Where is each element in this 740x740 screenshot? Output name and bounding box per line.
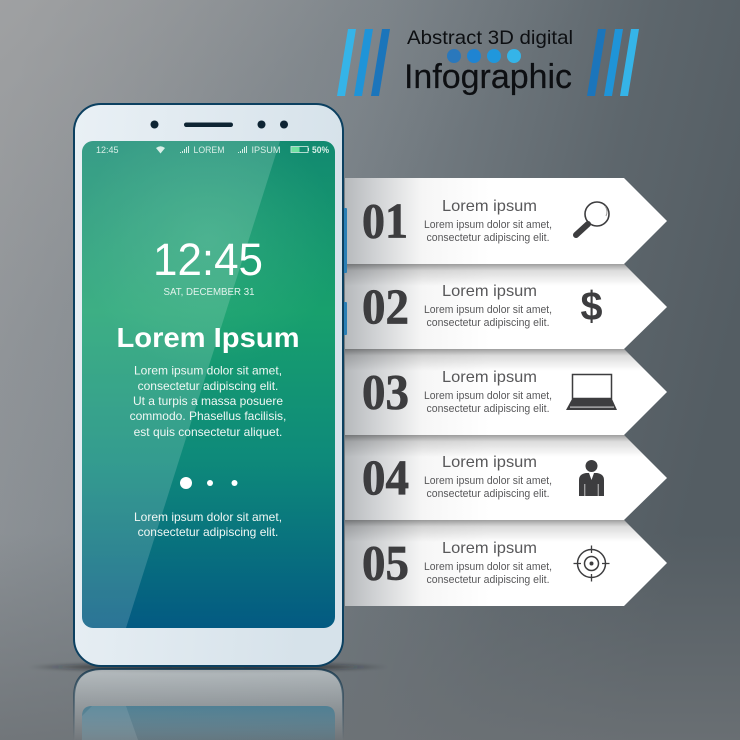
number 04: 04	[362, 449, 409, 505]
ribbon 5 text: Lorem ipsum dolor sit amet,	[424, 561, 552, 573]
ribbon 1 text: Lorem ipsum dolor sit amet,	[424, 219, 552, 231]
date: SAT, DECEMBER 31	[164, 287, 255, 298]
icon: target	[574, 546, 610, 582]
status bar	[96, 145, 329, 155]
heading line 1: Abstract 3D digital	[407, 27, 573, 49]
icon: dollar sign: $	[580, 283, 603, 329]
screen paragraph	[130, 364, 286, 439]
ribbon 2 text: consectetur adipiscing elit.	[426, 317, 550, 329]
heading line 2: Infographic	[404, 58, 572, 96]
screen caption: Lorem ipsum dolor sit amet,	[134, 510, 282, 524]
ribbon 1 text	[424, 198, 552, 244]
screen paragraph: consectetur adipiscing elit.	[138, 379, 278, 393]
icon: magnifying glass	[576, 202, 609, 235]
glass reflection	[82, 141, 280, 628]
icon: wifi	[156, 146, 165, 154]
ribbon 4 text	[424, 454, 552, 500]
side buttons	[343, 208, 347, 335]
ribbon 3	[345, 349, 667, 435]
ribbon 4 text: Lorem ipsum dolor sit amet,	[424, 475, 552, 487]
left blue stripes	[337, 29, 390, 96]
number 03: 03	[362, 364, 409, 420]
ribbon 3 text: Lorem ipsum dolor sit amet,	[424, 390, 552, 402]
clock: 12:45	[153, 234, 263, 285]
ribbon 5	[345, 520, 667, 606]
status bar: 12:45	[96, 145, 119, 155]
pagination dots	[180, 477, 238, 489]
icon: laptop	[566, 374, 617, 410]
front camera	[150, 120, 158, 128]
ribbon 2	[345, 264, 667, 349]
ribbon 2 text: Lorem ipsum dolor sit amet,	[424, 304, 552, 316]
screen paragraph: Lorem ipsum dolor sit amet,	[134, 364, 282, 378]
screen paragraph: est quis consectetur aliquet.	[134, 425, 282, 439]
phone body	[74, 104, 343, 666]
screen heading: Lorem Ipsum	[116, 322, 300, 353]
phone	[74, 104, 343, 666]
ribbon 5 text: Lorem ipsum	[442, 540, 537, 557]
sensor left	[258, 120, 266, 128]
status bar: LOREM	[194, 145, 224, 155]
icon: businessman	[579, 460, 604, 496]
status bar: IPSUM	[252, 145, 280, 155]
signal bars 1	[180, 146, 189, 153]
status bar: 50%	[312, 145, 329, 155]
screen caption: consectetur adipiscing elit.	[138, 525, 278, 539]
number 01: 01	[362, 192, 408, 248]
ribbon 5 text	[424, 540, 552, 586]
sensor right	[280, 120, 288, 128]
ribbon 5 text: consectetur adipiscing elit.	[426, 574, 550, 586]
icon: battery	[291, 146, 309, 152]
screen caption	[134, 510, 282, 539]
ribbon 2 text: Lorem ipsum	[442, 283, 537, 300]
floor shadow	[26, 662, 390, 672]
screen	[82, 141, 335, 628]
ribbon 3 text: consectetur adipiscing elit.	[426, 403, 550, 415]
earpiece	[184, 122, 233, 127]
ribbon 4	[345, 435, 667, 520]
ribbons	[345, 178, 667, 606]
ribbon 4 text: consectetur adipiscing elit.	[426, 488, 550, 500]
ribbon 1 text: consectetur adipiscing elit.	[426, 232, 550, 244]
number 02: 02	[362, 278, 409, 334]
right blue stripes	[587, 29, 639, 96]
ribbon 1 text: Lorem ipsum	[442, 198, 537, 215]
ribbon 4 text: Lorem ipsum	[442, 454, 537, 471]
screen paragraph: commodo. Phasellus facilisis,	[130, 409, 286, 423]
ribbon 3 text: Lorem ipsum	[442, 369, 537, 386]
signal bars 2	[238, 146, 247, 153]
blue dots	[447, 49, 521, 63]
phone reflection	[74, 669, 343, 740]
ribbon 2 text	[424, 283, 552, 329]
ribbon 1	[345, 178, 667, 264]
title block	[337, 27, 639, 96]
screen paragraph: Ut a turpis a massa posuere	[133, 394, 283, 408]
ribbon 3 text	[424, 369, 552, 415]
number 05: 05	[362, 534, 409, 590]
